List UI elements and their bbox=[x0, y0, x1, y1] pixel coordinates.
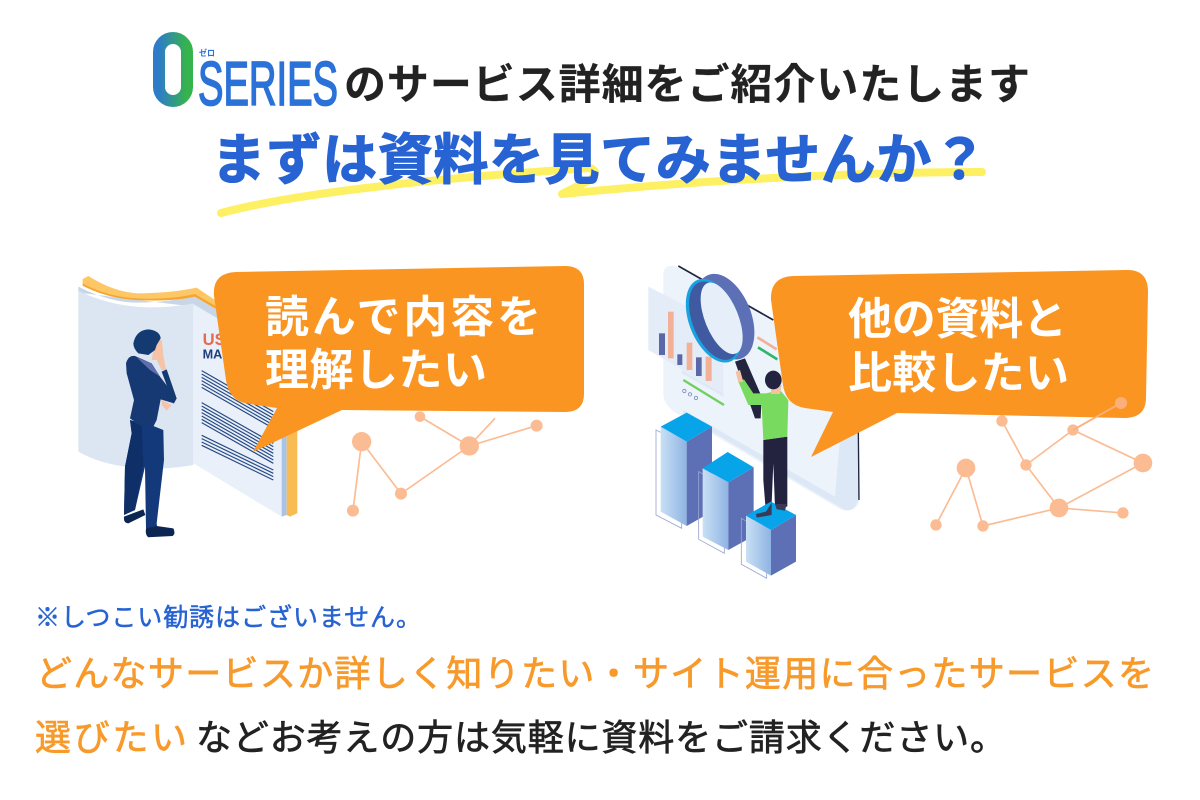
logo katakana ruby: ゼロ bbox=[199, 48, 215, 58]
note: no pushy sales: ※しつこい勧誘はございません。 bbox=[35, 603, 421, 632]
illustration: book and network left bbox=[78, 276, 543, 517]
black phrase: などお考えの方は気軽に資料をご請求ください。 bbox=[196, 717, 1006, 758]
body line 2 bbox=[35, 717, 1006, 758]
side chart panel bbox=[648, 287, 723, 393]
monitor bbox=[663, 266, 860, 511]
bubble text line 1: 他の資料と bbox=[848, 295, 1067, 344]
network nodes left bbox=[347, 411, 543, 517]
bubble text line 1: 読んで内容を bbox=[265, 293, 541, 342]
body line 1 in orange: どんなサービスか詳しく知りたい・サイト運用に合ったサービスを bbox=[36, 653, 1154, 694]
book bbox=[78, 276, 297, 517]
bubble shape bbox=[771, 270, 1148, 457]
person's feet on block 3 bbox=[756, 503, 787, 518]
magnifying glass bbox=[675, 265, 766, 418]
logo zero mark bbox=[159, 38, 187, 101]
logo word SERIES: SERIES bbox=[198, 50, 338, 119]
bubble shape bbox=[214, 266, 584, 452]
orange phrase: 選びたい bbox=[35, 717, 187, 758]
man in suit bbox=[124, 329, 177, 537]
logo: 0 SERIES bbox=[159, 38, 338, 119]
speech bubble right bbox=[771, 270, 1148, 457]
person in green shirt bbox=[736, 370, 788, 513]
data block 1 bbox=[656, 413, 712, 528]
network node over bubble bbox=[1073, 397, 1127, 430]
bubble text line 2: 理解したい bbox=[265, 346, 487, 395]
bubble text line 2: 比較したい bbox=[848, 349, 1069, 398]
speech bubble left bbox=[214, 266, 584, 452]
book: USER bbox=[203, 330, 249, 349]
network nodes right bbox=[930, 403, 1152, 532]
book: MARKETING bbox=[203, 348, 279, 362]
data block 3 bbox=[741, 502, 796, 578]
heading line 1: のサービス詳細をご紹介いたします bbox=[344, 61, 1030, 108]
yellow highlight swoosh bbox=[221, 168, 982, 213]
illustration: person with magnifier and data blocks bbox=[648, 265, 1152, 578]
data block 2 bbox=[699, 452, 754, 553]
heading line 2: まずは資料を見てみませんか？ bbox=[211, 129, 987, 191]
